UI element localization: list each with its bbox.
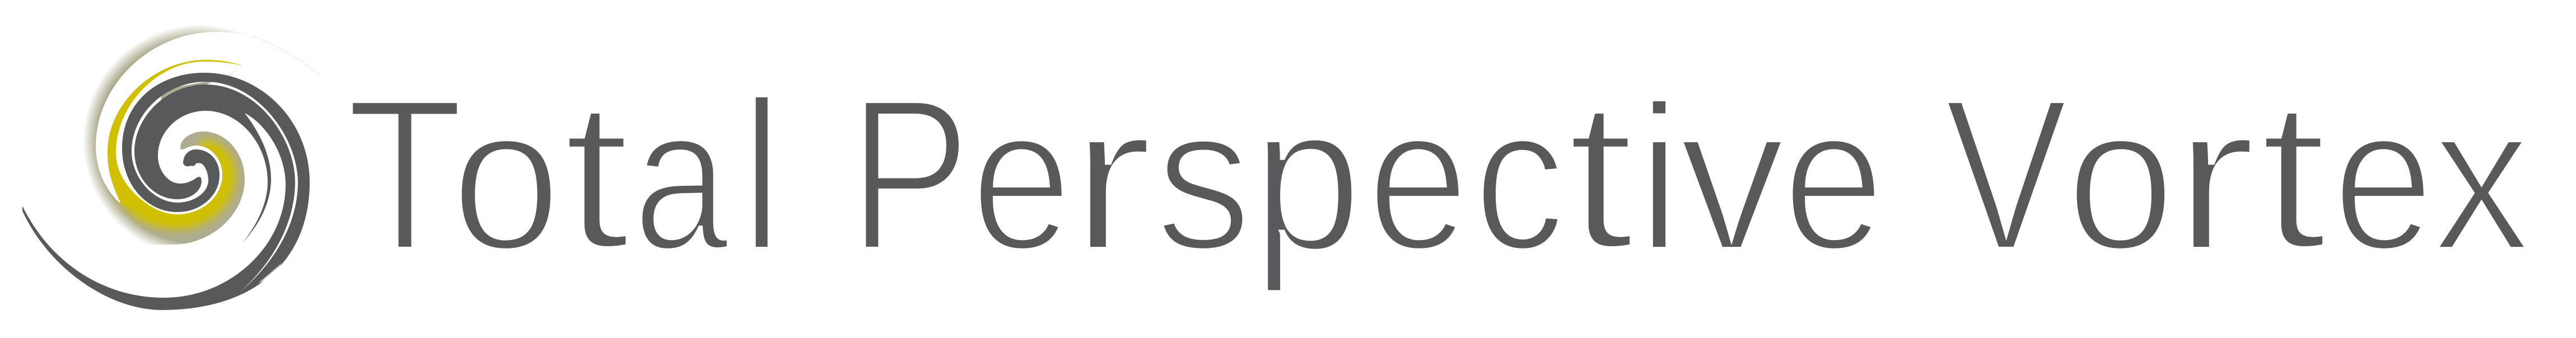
arm: feathered streak at the lower right (259, 263, 282, 283)
word: Perspective: t (1567, 56, 1636, 292)
word: Perspective: i (1637, 61, 1682, 294)
glow: yellow crescent (115, 139, 236, 229)
word: Perspective: P (848, 54, 970, 296)
word: Perspective: p (1252, 62, 1362, 295)
arm: white outer swirl (96, 32, 336, 203)
logo: vortex spiral (22, 17, 336, 310)
word: Total: a (633, 63, 730, 293)
title: Total Perspective Vortex (346, 53, 2531, 296)
word: Perspective: v (1679, 60, 1785, 294)
arm: white gap inside the yellow swirl (116, 62, 242, 214)
word: Perspective (848, 54, 1884, 296)
word: Vortex: r (2173, 61, 2257, 294)
word: Total (346, 53, 783, 296)
word: Perspective: r (1070, 61, 1154, 294)
halo: grey glow behind the spiral (78, 17, 336, 245)
word: Total: l (740, 56, 783, 295)
arm: dark grey spiral (22, 73, 310, 310)
word: Vortex: x (2433, 61, 2531, 294)
word: Perspective: c (1473, 63, 1565, 293)
word: Total: t (563, 56, 632, 292)
arm: yellow swirl (108, 60, 242, 208)
word: Vortex: e (2332, 63, 2434, 293)
word: Perspective: e (970, 63, 1072, 293)
word: Perspective: e (1367, 63, 1469, 293)
word: Vortex: o (2066, 64, 2175, 293)
word: Vortex: t (2260, 56, 2328, 292)
word: Vortex (1944, 53, 2531, 296)
word: Perspective: s (1155, 64, 1252, 293)
word: Perspective: e (1782, 63, 1884, 293)
word: Vortex: V (1944, 53, 2069, 296)
arm: faint tail of the glow (252, 36, 320, 76)
word: Total: o (451, 63, 562, 293)
word: Total: T (346, 53, 464, 296)
